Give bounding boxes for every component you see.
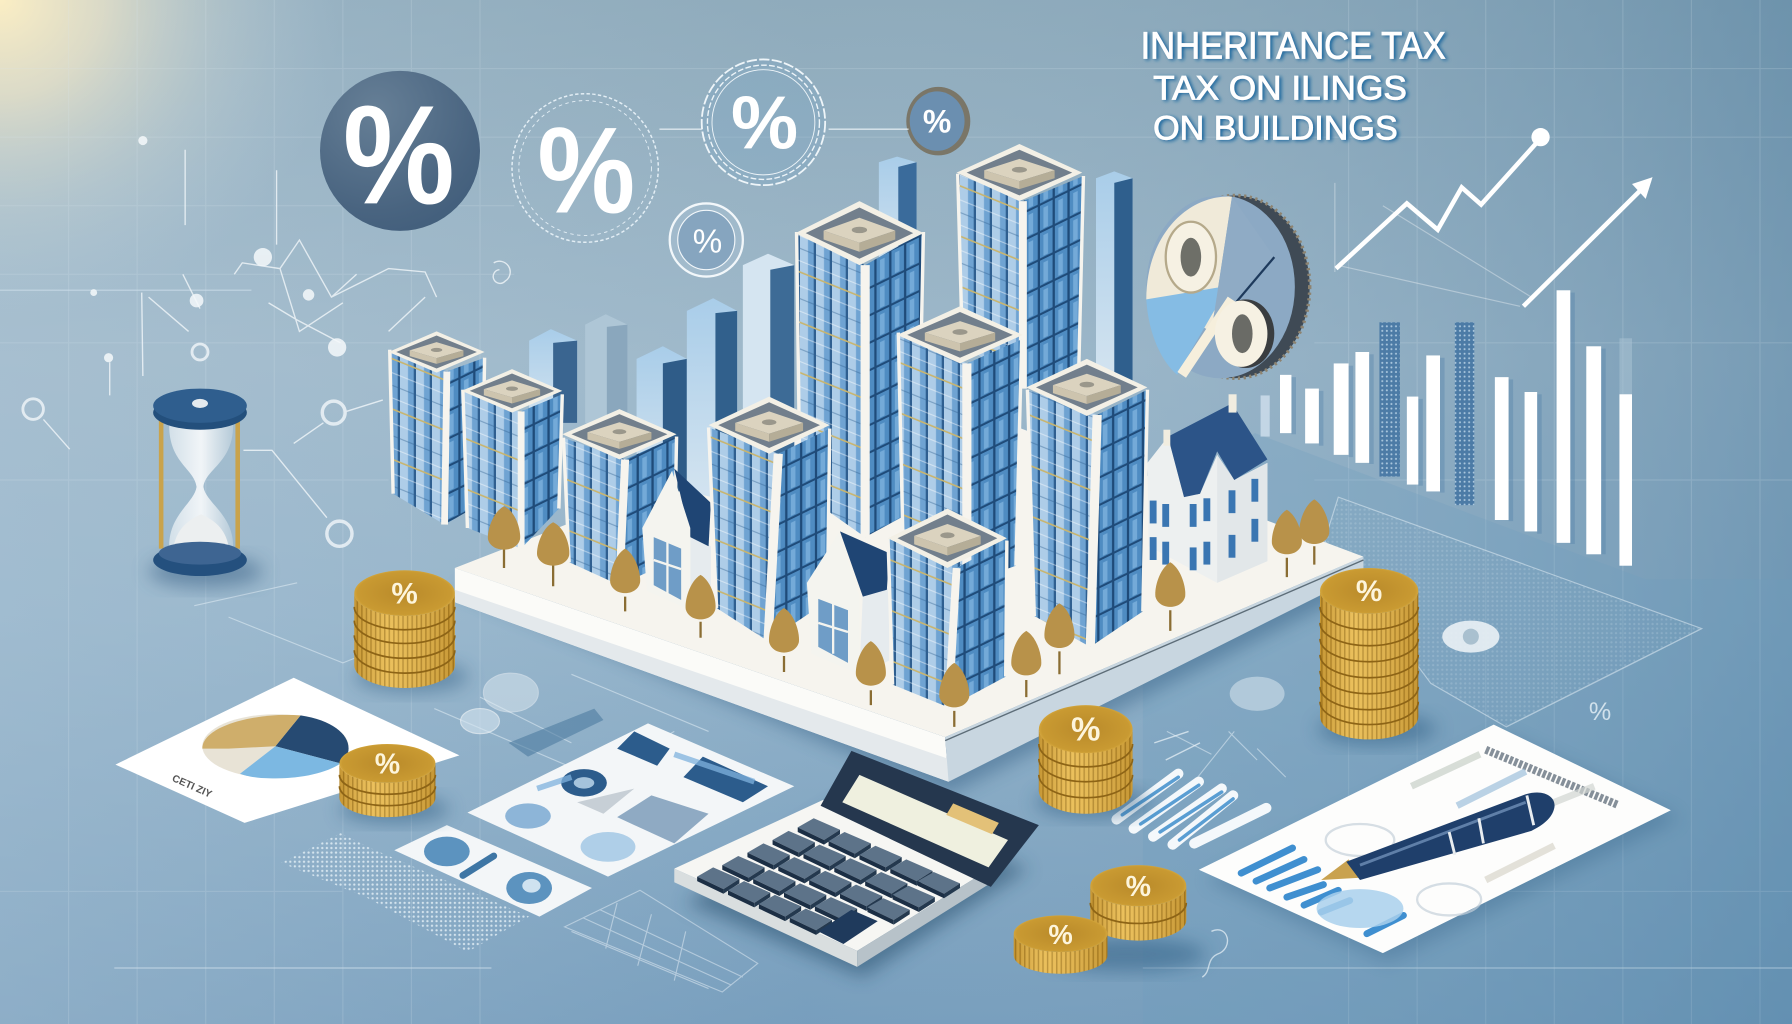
glass xyxy=(169,425,233,546)
coin stacks xyxy=(339,568,1437,974)
floating swirl icons: % xyxy=(1589,698,1611,726)
sketched lines under calculator xyxy=(565,890,758,992)
building: far left xyxy=(389,331,485,525)
percent ring lower xyxy=(1217,299,1274,368)
coin stack: centre: % xyxy=(1071,712,1100,749)
platform xyxy=(455,389,1371,794)
buildings xyxy=(389,144,1267,707)
badge: ring percent top xyxy=(702,59,825,185)
floor behind bars xyxy=(1143,433,1792,1024)
coin stack: left xyxy=(354,570,469,693)
paper: small icons sheet xyxy=(394,825,592,917)
percent ring upper xyxy=(1166,222,1216,293)
mini pie chart xyxy=(202,714,349,778)
calculator xyxy=(674,751,1039,977)
coin stack: bottom pair: % xyxy=(1126,871,1151,903)
floating percent badges xyxy=(320,59,970,277)
floor map sketches xyxy=(194,497,1702,789)
house: centre xyxy=(807,531,889,674)
paper: big icons sheet xyxy=(467,723,794,877)
3D bars behind buildings xyxy=(529,157,1133,503)
house: left xyxy=(642,469,711,610)
badge: dark circle percent: % xyxy=(343,77,455,234)
building: third left xyxy=(562,409,677,585)
house windows xyxy=(1150,479,1258,570)
badge: ring percent top: % xyxy=(731,81,798,165)
building: second left xyxy=(462,369,562,549)
keypad xyxy=(697,818,960,944)
building: front xyxy=(888,509,1007,707)
display panel xyxy=(821,751,1039,887)
badge: small bronze-rim percent: % xyxy=(923,104,951,140)
paper: pie report xyxy=(115,678,459,823)
badge: small ring percent xyxy=(670,203,743,277)
top cap xyxy=(153,395,247,430)
house walls xyxy=(1147,437,1267,583)
calculator body xyxy=(674,800,994,951)
trees xyxy=(488,499,1329,727)
coin stack: on pie report: % xyxy=(375,749,400,781)
coin stack: left: % xyxy=(391,577,418,610)
building: middle right xyxy=(897,306,1023,583)
base cap xyxy=(153,544,247,576)
single coin: % xyxy=(1048,919,1073,950)
badge: small bronze-rim percent xyxy=(906,87,970,155)
house: large right xyxy=(1147,394,1267,583)
badge: sketched ring percent: % xyxy=(538,102,635,239)
title xyxy=(1141,24,1446,147)
paper: pie report: CETI ZIY xyxy=(170,773,213,801)
blue stripes xyxy=(1117,774,1266,845)
badge: sketched ring percent xyxy=(512,94,658,242)
network scribbles xyxy=(23,150,510,546)
title: ON BUILDINGS xyxy=(1153,109,1398,147)
paper: report with pen xyxy=(1199,725,1680,962)
coin stack: on pie report xyxy=(339,744,449,823)
badge: dark circle percent xyxy=(320,71,480,234)
building: back tallest xyxy=(957,144,1083,389)
house roof xyxy=(1168,403,1267,497)
hourglass xyxy=(149,389,263,587)
pie slice: cream xyxy=(1146,196,1232,331)
floating swirl icons xyxy=(461,621,1611,757)
coin stack: centre xyxy=(1035,705,1150,817)
badge: small ring percent: % xyxy=(693,224,722,261)
pie slice: light blue xyxy=(1146,286,1229,375)
coin stack: bottom pair xyxy=(1046,865,1206,971)
dotted net texture xyxy=(281,833,529,952)
coin stack: right tall: % xyxy=(1356,575,1382,608)
building: centre front xyxy=(709,397,830,641)
title: INHERITANCE TAX xyxy=(1141,24,1446,66)
title: TAX ON ILINGS xyxy=(1153,69,1407,107)
building: right xyxy=(1026,359,1147,647)
pie chart disc xyxy=(1146,195,1310,378)
scattered white specks xyxy=(90,136,346,362)
building: tall centre xyxy=(795,201,923,537)
rising line chart xyxy=(1335,128,1653,306)
single coin xyxy=(1014,915,1107,974)
small sketch marks xyxy=(1154,731,1227,977)
white bar chart xyxy=(1261,290,1632,566)
coin stack: right tall xyxy=(1318,568,1437,745)
pen xyxy=(1321,793,1555,880)
